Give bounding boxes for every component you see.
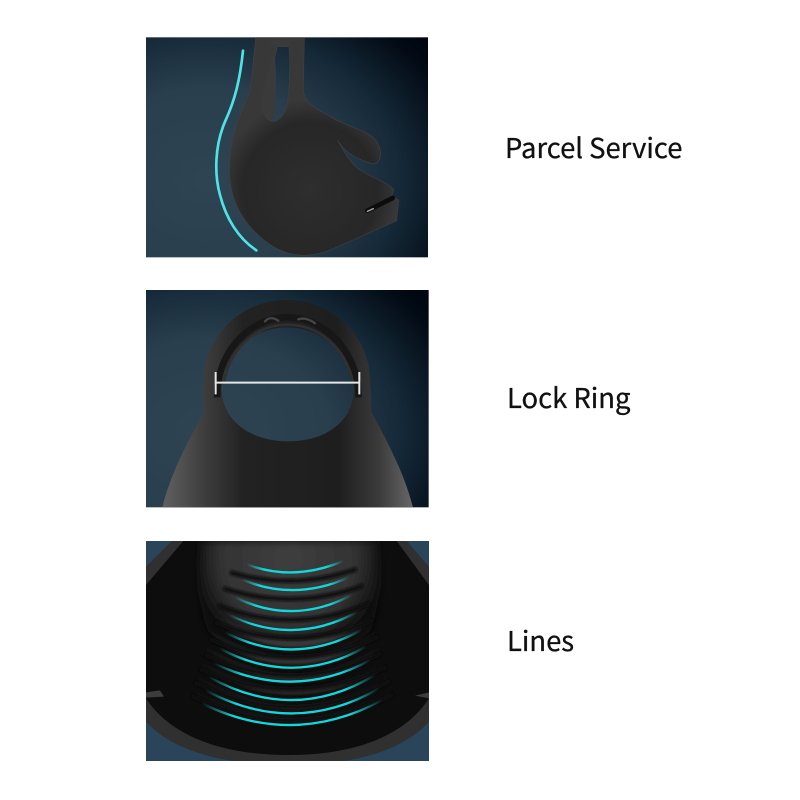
product: inner ring lip bbox=[217, 317, 358, 397]
product: ring and base bbox=[162, 300, 413, 509]
panel: lines image bbox=[146, 541, 429, 765]
heading: Lines: Lines bbox=[507, 619, 574, 659]
product: outer shell bbox=[146, 541, 429, 765]
measure line bbox=[216, 372, 359, 394]
product: rib shadows bbox=[192, 569, 393, 720]
product: gray bands bbox=[218, 626, 367, 718]
product: ribbed top bbox=[200, 541, 379, 655]
product: ring inner edge bbox=[223, 325, 353, 384]
product: inner cavity bbox=[146, 541, 429, 755]
product: ring top ridge bbox=[265, 318, 315, 323]
product: inner strap bbox=[262, 58, 276, 120]
cyan lines bbox=[202, 561, 383, 725]
heading: Parcel Service: Parcel Service bbox=[505, 126, 682, 166]
panel: parcel service image bbox=[146, 37, 428, 257]
panel: lock ring image bbox=[146, 290, 429, 509]
icon: cyan curve bbox=[216, 51, 256, 250]
product: side notches bbox=[146, 690, 429, 698]
heading: Lock Ring: Lock Ring bbox=[507, 376, 631, 416]
product: clasp detail bbox=[367, 198, 393, 211]
product: pouch body bbox=[229, 37, 399, 255]
